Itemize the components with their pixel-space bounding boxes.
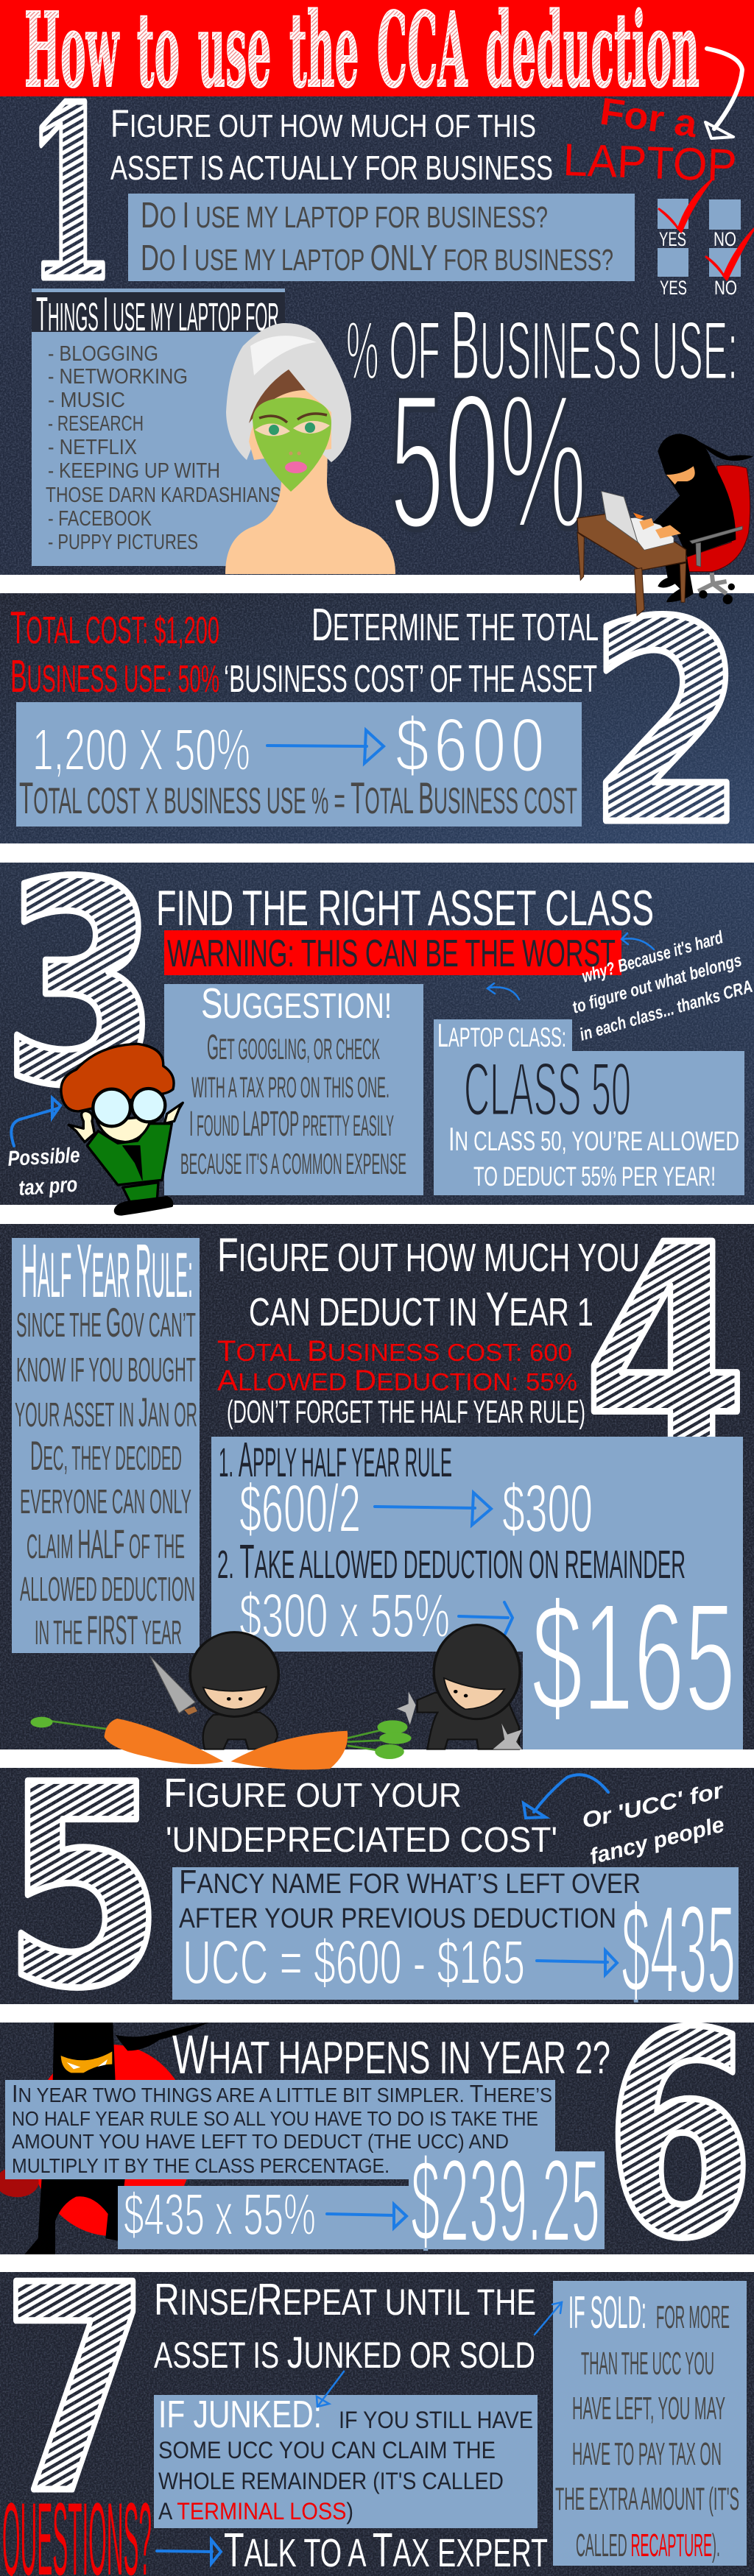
red figures: TOTAL BUSINESS COST: 600 — [217, 1335, 572, 1367]
handwritten: UCC note — [579, 1778, 727, 1869]
checkboxes: YES — [659, 228, 686, 250]
step 7 heading: RINSE/REPEAT UNTIL THE — [154, 2275, 536, 2324]
section 3 — [1, 824, 754, 1214]
calculation box: $600 — [395, 703, 549, 788]
numeral 7: 7 — [1, 2224, 150, 2557]
list panel — [32, 332, 286, 566]
question box: DO I USE MY LAPTOP FOR BUSINESS? — [141, 195, 548, 236]
red figures — [217, 1335, 577, 1397]
if junked panel: SOME UCC YOU CAN CLAIM THE — [158, 2437, 496, 2463]
handwritten note — [570, 927, 754, 1045]
section 1 — [25, 55, 754, 574]
question box: DO I USE MY LAPTOP ONLY FOR BUSINESS? — [141, 238, 613, 278]
if sold panel — [553, 2281, 747, 2566]
arrow — [327, 2204, 406, 2228]
arrow — [375, 1493, 491, 1525]
suggestion panel: GET GOOGLING, OR CHECK — [207, 1028, 380, 1067]
arrows near warning — [487, 933, 654, 999]
half year rule panel: IN THE FIRST YEAR — [35, 1607, 182, 1653]
if junked panel — [154, 2393, 538, 2528]
half year rule panel — [12, 1228, 200, 1653]
handwritten: possible tax pro — [7, 1144, 80, 1200]
list panel: - NETFLIX — [48, 436, 137, 459]
if junked panel: IF YOU STILL HAVE — [339, 2407, 533, 2433]
suggestion panel — [164, 980, 423, 1195]
checkboxes: NO — [714, 277, 737, 299]
list panel: - KEEPING UP WITH — [48, 459, 220, 483]
arrow to tax pro — [11, 1098, 60, 1146]
section 4: EVERYONE CAN ONLY — [20, 1482, 191, 1521]
calculation box — [16, 702, 582, 827]
section 4: ALLOWED DEDUCTION — [20, 1570, 195, 1608]
red cost figures: BUSINESS USE: 50% — [10, 651, 219, 702]
step 1 heading: FIGURE OUT HOW MUCH OF THIS — [110, 102, 536, 146]
checkboxes: YES — [660, 277, 687, 299]
step 5 heading — [163, 1770, 557, 1860]
header banner — [0, 0, 754, 111]
step 2 heading: DETERMINE THE TOTAL — [311, 600, 599, 651]
illustration: tax pro character — [61, 1044, 183, 1214]
numeral 5: 5 — [3, 1726, 165, 2050]
numeral 3: 3 — [1, 824, 161, 1147]
list panel: - FACEBOOK — [48, 507, 152, 531]
suggestion panel: SUGGESTION! — [201, 980, 392, 1027]
list panel: - MUSIC — [48, 389, 125, 412]
calculation panel: $300 — [502, 1471, 593, 1546]
checkboxes: NO — [714, 228, 736, 250]
question box — [128, 194, 635, 281]
list panel: - BLOGGING — [48, 342, 158, 366]
illustration: woman with face mask — [225, 323, 395, 574]
list panel: - NETWORKING — [48, 365, 188, 389]
step 4 heading — [217, 1228, 640, 1336]
red figures: ALLOWED DEDUCTION: 55% — [217, 1365, 577, 1397]
handwritten: for a laptop: For a — [597, 90, 700, 146]
arrow to if sold — [535, 2302, 562, 2335]
UCC panel — [172, 1863, 739, 2020]
arrow to if junked — [317, 2371, 344, 2407]
if junked panel: A TERMINAL LOSS) — [158, 2498, 353, 2524]
step 7 heading — [154, 2275, 536, 2377]
step 1 heading: ASSET IS ACTUALLY FOR BUSINESS — [110, 149, 553, 187]
half year rule panel: CLAIM HALF OF THE — [27, 1521, 185, 1567]
year two panel: $435 x 55% — [124, 2182, 316, 2247]
handwritten: UCC note: Or 'UCC' for — [579, 1778, 727, 1833]
arrow to heading — [524, 1774, 608, 1818]
list panel: THOSE DARN KARDASHIANS — [46, 484, 281, 507]
handwritten: possible tax pro: Possible — [7, 1144, 80, 1171]
arrow — [537, 1950, 617, 1975]
UCC panel: AFTER YOUR PREVIOUS DEDUCTION — [179, 1903, 616, 1934]
calculation panel — [211, 1432, 743, 1749]
section 6 — [0, 1973, 754, 2301]
arrow to tax expert — [157, 2540, 221, 2563]
if junked panel: WHOLE REMAINDER (IT'S CALLED — [158, 2468, 504, 2494]
arrow — [267, 730, 384, 763]
red cost figures — [10, 603, 219, 702]
section 7 — [1, 2224, 747, 2576]
half year rule panel: DEC, THEY DECIDED — [30, 1433, 182, 1479]
step 7 heading: ASSET IS JUNKED OR SOLD — [154, 2328, 535, 2377]
checkboxes — [658, 180, 754, 299]
section 2 — [10, 563, 747, 887]
year two panel: NO HALF YEAR RULE SO ALL YOU HAVE TO DO IS TAKE THE — [12, 2107, 538, 2130]
year two panel — [5, 2080, 605, 2266]
step 2 heading — [224, 600, 599, 701]
half year rule panel: SINCE THE GOV CAN’T — [16, 1300, 196, 1345]
step 5 heading: FIGURE OUT YOUR — [163, 1770, 462, 1816]
if sold panel: IF SOLD: — [568, 2287, 646, 2338]
illustration: ninjas with carrots — [30, 1625, 522, 1770]
laptop class panel: LAPTOP CLASS: — [437, 1018, 566, 1054]
calculation box: 1,200 X 50% — [32, 717, 250, 782]
suggestion panel: I FOUND LAPTOP PRETTY EASILY — [189, 1105, 394, 1144]
half year rule panel: YOUR ASSET IN JAN OR — [15, 1390, 197, 1435]
half year rule panel: HALF YEAR RULE: — [21, 1228, 193, 1313]
section 5 — [3, 1726, 739, 2050]
UCC panel: FANCY NAME FOR WHAT’S LEFT OVER — [179, 1863, 641, 1900]
laptop class panel — [434, 1018, 744, 1195]
numeral 1: 1 — [25, 55, 116, 333]
list panel: - PUPPY PICTURES — [48, 531, 198, 554]
section 4 — [12, 1184, 748, 1749]
if junked panel: IF JUNKED: — [158, 2393, 322, 2436]
illustration: caped ninja — [0, 2023, 208, 2254]
year two panel: MULTIPLY IT BY THE CLASS PERCENTAGE. — [12, 2154, 390, 2177]
section 4: KNOW IF YOU BOUGHT — [16, 1351, 196, 1389]
step 5 heading: 'UNDEPRECIATED COST' — [166, 1821, 557, 1860]
year two panel: IN YEAR TWO THINGS ARE A LITTLE BIT SIMPLER. THERE’S — [12, 2081, 552, 2108]
white dividers — [0, 575, 754, 2272]
talk to a tax expert: TALK TO A TAX EXPERT — [224, 2523, 548, 2576]
calculation panel: $300 x 55% — [239, 1581, 450, 1650]
handwritten: UCC note: fancy people — [588, 1813, 727, 1869]
handwritten: for a laptop: LAPTOP — [563, 135, 738, 191]
section 3: BECAUSE IT'S A COMMON EXPENSE — [180, 1148, 406, 1181]
red cost figures: TOTAL COST: $1,200 — [10, 603, 219, 654]
list panel: - RESEARCH — [48, 412, 144, 436]
list heading — [32, 287, 285, 341]
handwritten: for a laptop — [563, 90, 738, 191]
year two panel: AMOUNT YOU HAVE LEFT TO DEDUCT (THE UCC) AND — [12, 2130, 509, 2153]
step 1 heading — [110, 102, 553, 187]
calculation box: TOTAL COST X BUSINESS USE % = TOTAL BUSINESS COST — [19, 774, 577, 823]
suggestion panel: WITH A TAX PRO ON THIS ONE. — [191, 1072, 390, 1104]
calculation panel: $600/2 — [239, 1471, 361, 1546]
arrow — [459, 1602, 512, 1634]
calculation panel: 1. APPLY HALF YEAR RULE — [219, 1432, 452, 1487]
step 4 heading: CAN DEDUCT IN YEAR 1 — [249, 1282, 593, 1336]
list heading: THINGS I USE MY LAPTOP FOR — [36, 287, 279, 341]
handwritten: possible tax pro: tax pro — [18, 1172, 78, 1200]
illustration: ninja at desk with laptop — [577, 434, 753, 616]
UCC panel: UCC = $600 - $165 — [183, 1928, 525, 1997]
arrow: title to laptop — [705, 49, 742, 138]
